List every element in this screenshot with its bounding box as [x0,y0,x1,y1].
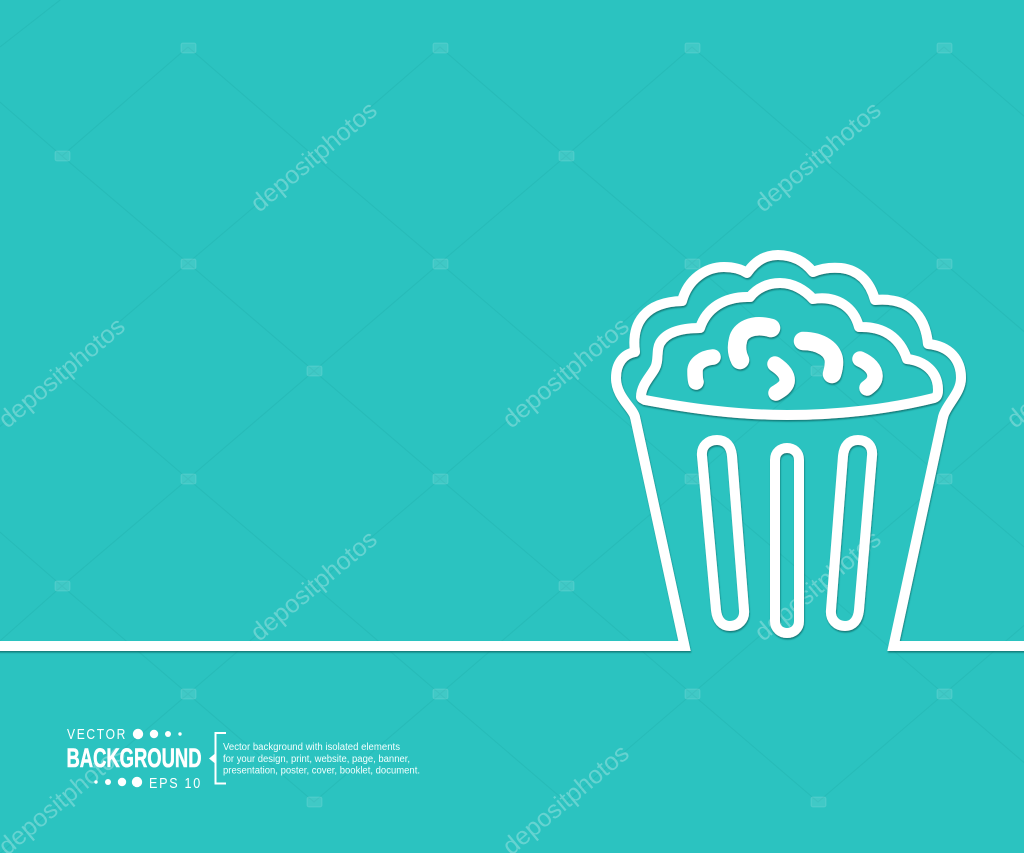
description text: Vector background with isolated elements [223,742,400,753]
watermarks: depositphotos [749,96,887,218]
inner popcorn outline [641,283,938,415]
watermarks: depositphotos [245,525,383,647]
kernel: small centre [775,364,787,393]
stripe: right [831,440,872,626]
logo block: VECTOR BACKGROUND EPS 10 [66,727,420,792]
icon: popcorn bucket line art [0,255,1024,646]
watermarks: depositphotos [749,525,887,647]
dots: bottom row [94,777,142,787]
kernel: small right [860,359,875,388]
watermarks: depositphotos [497,312,635,434]
label: VECTOR: VECTOR [67,727,127,743]
kernel: small left [695,357,713,382]
stripe: left [702,440,744,626]
kernel: large left [737,326,771,360]
bracket with pointer [209,733,226,784]
watermarks: depositphotos [245,96,383,218]
label: BACKGROUND: BACKGROUND [66,743,202,773]
description text: presentation, poster, cover, booklet, document. [223,766,420,776]
kernel: large right [803,341,834,374]
watermark camera icons [55,43,952,807]
label: EPS 10: EPS 10 [149,776,202,792]
dots: top row [133,729,182,739]
stripe: centre [775,448,799,633]
baseline and bucket outline [0,417,684,646]
description text: for your design, print, website, page, banner, [223,754,410,765]
description text [223,742,420,776]
